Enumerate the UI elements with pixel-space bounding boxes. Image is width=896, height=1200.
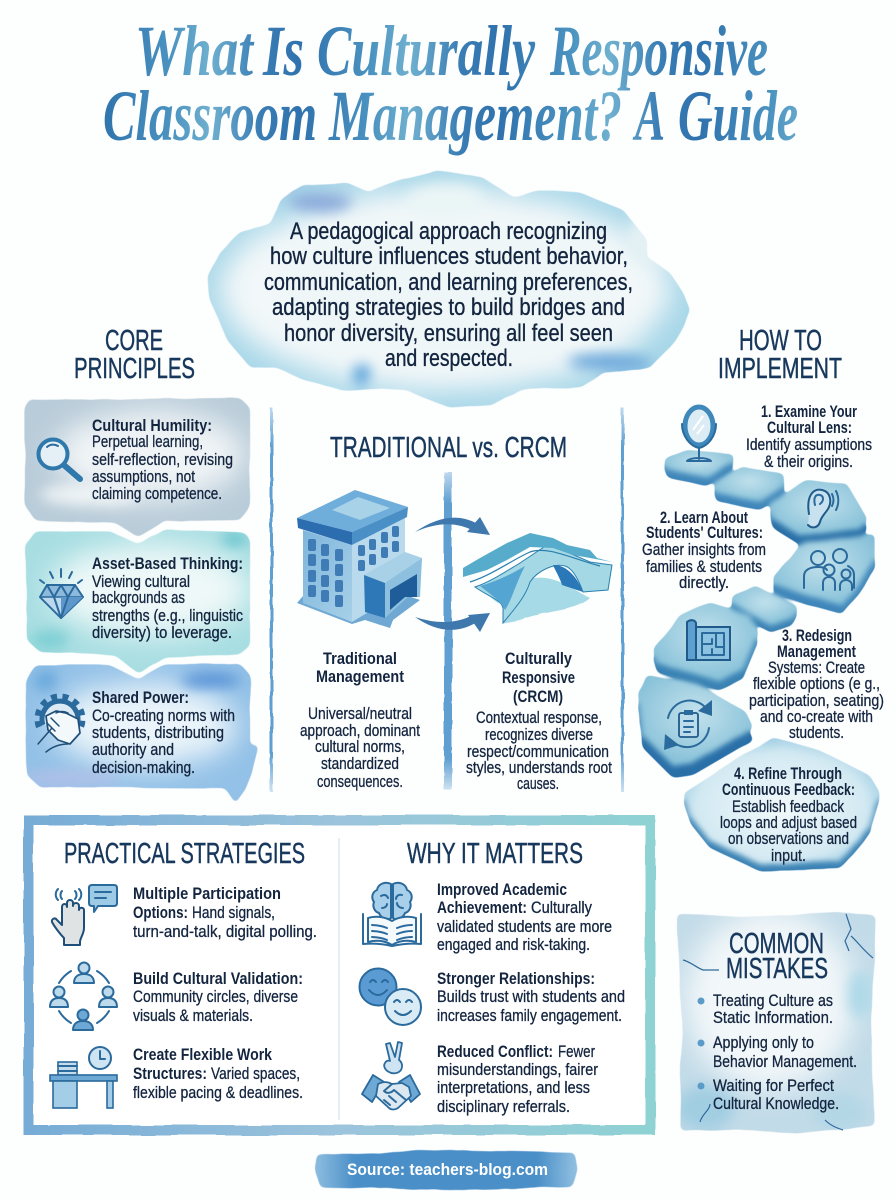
text: traditional management: Management bbox=[316, 667, 404, 686]
step 1: Cultural Lens: bbox=[767, 418, 852, 437]
text: stronger relationships: Builds trust with students and bbox=[437, 987, 625, 1006]
icon: family bbox=[804, 549, 854, 590]
card text: backgrounds as bbox=[92, 588, 185, 607]
card text: decision-making. bbox=[92, 758, 195, 777]
card text: Viewing cultural bbox=[92, 572, 190, 591]
card text bbox=[92, 416, 233, 503]
step 3: Management bbox=[777, 642, 856, 661]
common mistakes text: MISTAKES bbox=[726, 953, 828, 985]
text: reduced conflict: interpretations, and less bbox=[437, 1078, 590, 1097]
title: What bbox=[135, 11, 254, 91]
card text: diversity) to leverage. bbox=[92, 623, 232, 642]
heading: how to implement: HOW TO bbox=[739, 325, 822, 357]
panel: definition cloud bbox=[208, 170, 690, 408]
text: create flexible work structures: Create Flexible Work bbox=[133, 1045, 272, 1064]
card text: authority and bbox=[92, 740, 174, 759]
icon: blueprint bbox=[687, 620, 730, 660]
text: culturally responsive: Culturally bbox=[505, 649, 572, 668]
text: create flexible work structures: flexible pacing & deadlines. bbox=[133, 1083, 303, 1102]
text: culturally responsive: recognizes diverse bbox=[485, 725, 593, 744]
text: stronger relationships: Stronger Relationships: bbox=[437, 969, 595, 988]
text: build cultural validation: visuals & materials. bbox=[133, 1006, 253, 1025]
card text: claiming competence. bbox=[92, 484, 222, 503]
panel: asset-based thinking card bbox=[24, 529, 250, 672]
text: traditional management: cultural norms, bbox=[315, 737, 405, 756]
text: traditional management: Universal/neutral bbox=[308, 704, 412, 723]
card text bbox=[92, 688, 235, 777]
text: build cultural validation: Build Cultural Validation: bbox=[133, 969, 303, 988]
icon: community circle bbox=[50, 962, 117, 1030]
heading: how to implement bbox=[718, 325, 842, 385]
text: reduced conflict: Reduced Conflict: bbox=[437, 1042, 553, 1061]
panel: common mistakes bbox=[676, 912, 876, 1134]
card text bbox=[92, 554, 243, 642]
text: improved academic achievement: validated students are more bbox=[437, 917, 612, 936]
common mistakes text: Treating Culture as bbox=[713, 991, 833, 1010]
icon: traditional building bbox=[297, 490, 422, 628]
bullets bbox=[698, 998, 704, 1090]
card text: Shared Power: bbox=[92, 688, 189, 707]
text: culturally responsive: styles, understands root bbox=[466, 758, 612, 777]
text: traditional management: consequences. bbox=[317, 772, 403, 791]
text: multiple participation options: turn-and-talk, digital polling. bbox=[133, 922, 317, 941]
title: Culturally bbox=[317, 11, 536, 91]
step 1: 1. Examine Your bbox=[761, 402, 857, 421]
text: improved academic achievement: Culturally bbox=[531, 898, 592, 917]
text: stronger relationships bbox=[437, 969, 625, 1025]
step 3 bbox=[749, 626, 884, 742]
text: improved academic achievement: Achievement: bbox=[437, 898, 527, 917]
card text: strengths (e.g., linguistic bbox=[92, 606, 243, 625]
text: reduced conflict bbox=[437, 1042, 598, 1116]
heading: practical strategies: PRACTICAL STRATEGIES bbox=[64, 838, 305, 870]
panel: cultural humility card bbox=[24, 397, 250, 536]
text: stronger relationships: increases family engagement. bbox=[437, 1006, 622, 1025]
icon: gear with clasped hands bbox=[38, 696, 82, 752]
step 4: input. bbox=[771, 846, 806, 865]
icon: brain over open book bbox=[363, 883, 421, 946]
text: improved academic achievement: Improved Academic bbox=[437, 880, 567, 899]
icon: two smiling faces bbox=[360, 968, 421, 1025]
step 2: directly. bbox=[679, 573, 729, 592]
text: culturally responsive: causes. bbox=[517, 774, 559, 793]
arrow: bottom curved arrow bbox=[415, 613, 490, 632]
step 4: on observations and bbox=[728, 829, 849, 848]
step 2: families & students bbox=[646, 557, 762, 576]
common mistakes text: Applying only to bbox=[713, 1033, 814, 1052]
icon: clipboard cycle bbox=[664, 700, 712, 750]
icon: peace sign and handshake bbox=[362, 1042, 420, 1110]
card text: self-reflection, revising bbox=[92, 450, 233, 469]
stepping stones path bbox=[638, 450, 880, 871]
card text: Asset-Based Thinking: bbox=[92, 554, 243, 573]
text: traditional management bbox=[300, 649, 420, 791]
title: Management? bbox=[328, 76, 622, 156]
title: Classroom bbox=[103, 76, 317, 156]
icon: bridge bbox=[463, 533, 612, 623]
step 2: Students' Cultures: bbox=[646, 523, 763, 542]
text: traditional management: approach, dominant bbox=[300, 721, 420, 740]
step 2: 2. Learn About bbox=[660, 508, 748, 527]
icon: desk with clock and books bbox=[50, 1047, 117, 1108]
implementation steps text bbox=[642, 402, 884, 865]
common mistakes text: Cultural Knowledge. bbox=[713, 1094, 839, 1113]
definition text bbox=[264, 218, 633, 372]
title: A bbox=[633, 76, 665, 156]
text: multiple participation options: Options: bbox=[133, 903, 188, 922]
text: traditional management: Traditional bbox=[323, 649, 397, 668]
card text: Co-creating norms with bbox=[92, 706, 235, 725]
step 2 bbox=[642, 508, 766, 592]
definition text: communication, and learning preferences, bbox=[264, 269, 633, 296]
text: create flexible work structures: Varied spaces, bbox=[211, 1064, 300, 1083]
step 1 bbox=[746, 402, 872, 471]
text: build cultural validation bbox=[133, 969, 303, 1025]
common mistakes text: Waiting for Perfect bbox=[713, 1076, 834, 1095]
icon: mirror bbox=[682, 407, 716, 461]
definition text: and respected. bbox=[385, 345, 513, 372]
icon: raised hand with signals and chat bbox=[52, 885, 117, 945]
step 4: loops and adjust based bbox=[720, 813, 857, 832]
common mistakes text: Behavior Management. bbox=[713, 1052, 857, 1071]
step 3: 3. Redesign bbox=[782, 626, 852, 645]
step 3: Systems: Create bbox=[768, 658, 865, 677]
heading: why it matters: WHY IT MATTERS bbox=[407, 838, 583, 870]
source banner: Source: teachers-blog.com bbox=[347, 1160, 548, 1179]
arrow: top curved arrow bbox=[415, 517, 490, 535]
text: multiple participation options bbox=[133, 884, 317, 941]
text: culturally responsive: Responsive bbox=[502, 668, 575, 687]
step 1: & their origins. bbox=[764, 452, 853, 471]
step 4: Establish feedback bbox=[732, 797, 844, 816]
text: culturally responsive bbox=[466, 649, 612, 793]
heading: how to implement: IMPLEMENT bbox=[718, 353, 842, 385]
text: reduced conflict: Fewer bbox=[558, 1042, 595, 1061]
title: Responsive bbox=[549, 11, 768, 91]
text: build cultural validation: Community circles, diverse bbox=[133, 987, 298, 1006]
common mistakes text bbox=[713, 928, 857, 1113]
card text: assumptions, not bbox=[92, 467, 195, 486]
title: Is bbox=[262, 11, 304, 91]
text: culturally responsive: (CRCM) bbox=[513, 687, 563, 706]
text: culturally responsive: Contextual response, bbox=[476, 708, 602, 727]
heading: core principles bbox=[74, 325, 195, 385]
text: improved academic achievement: engaged and risk-taking. bbox=[437, 935, 590, 954]
text: create flexible work structures: Structures: bbox=[133, 1064, 207, 1083]
icon: diamond bbox=[40, 569, 83, 618]
text: improved academic achievement bbox=[437, 880, 612, 954]
definition text: A pedagogical approach recognizing bbox=[290, 218, 607, 245]
text: culturally responsive: respect/communication bbox=[467, 742, 609, 761]
heading: core principles: CORE bbox=[105, 325, 163, 357]
title bbox=[103, 11, 798, 156]
step 4: 4. Refine Through bbox=[734, 764, 842, 783]
step 4 bbox=[720, 764, 857, 865]
icon: ear bbox=[808, 490, 838, 527]
panel: strategies and why it matters frame bbox=[28, 820, 650, 1130]
text: reduced conflict: disciplinary referrals. bbox=[437, 1097, 570, 1116]
common mistakes text: COMMON bbox=[729, 928, 824, 960]
panel: shared power card bbox=[25, 663, 258, 802]
definition text: honor diversity, ensuring all feel seen bbox=[284, 320, 613, 347]
icon: magnifying glass bbox=[38, 440, 80, 479]
card text: Cultural Humility: bbox=[92, 416, 212, 435]
title: Guide bbox=[678, 76, 798, 156]
text: multiple participation options: Multiple Participation bbox=[133, 884, 281, 903]
step 3: and co-create with bbox=[760, 707, 873, 726]
step 2: Gather insights from bbox=[642, 540, 766, 559]
card text: Perpetual learning, bbox=[92, 432, 203, 451]
text: multiple participation options: Hand signals, bbox=[192, 903, 275, 922]
text: reduced conflict: misunderstandings, fairer bbox=[437, 1060, 598, 1079]
common mistakes text: Static Information. bbox=[713, 1008, 833, 1027]
heading: core principles: PRINCIPLES bbox=[74, 353, 195, 385]
definition text: adapting strategies to build bridges and bbox=[272, 294, 625, 321]
windows bbox=[308, 526, 399, 607]
source banner bbox=[315, 1150, 578, 1190]
text: create flexible work structures bbox=[133, 1045, 303, 1102]
card text: students, distributing bbox=[92, 723, 224, 742]
step 3: students. bbox=[789, 723, 844, 742]
text: traditional management: standardized bbox=[321, 754, 399, 773]
definition text: how culture influences student behavior, bbox=[270, 243, 628, 270]
heading: traditional vs crcm: TRADITIONAL vs. CRCM bbox=[330, 432, 567, 464]
center divider bbox=[444, 472, 452, 790]
